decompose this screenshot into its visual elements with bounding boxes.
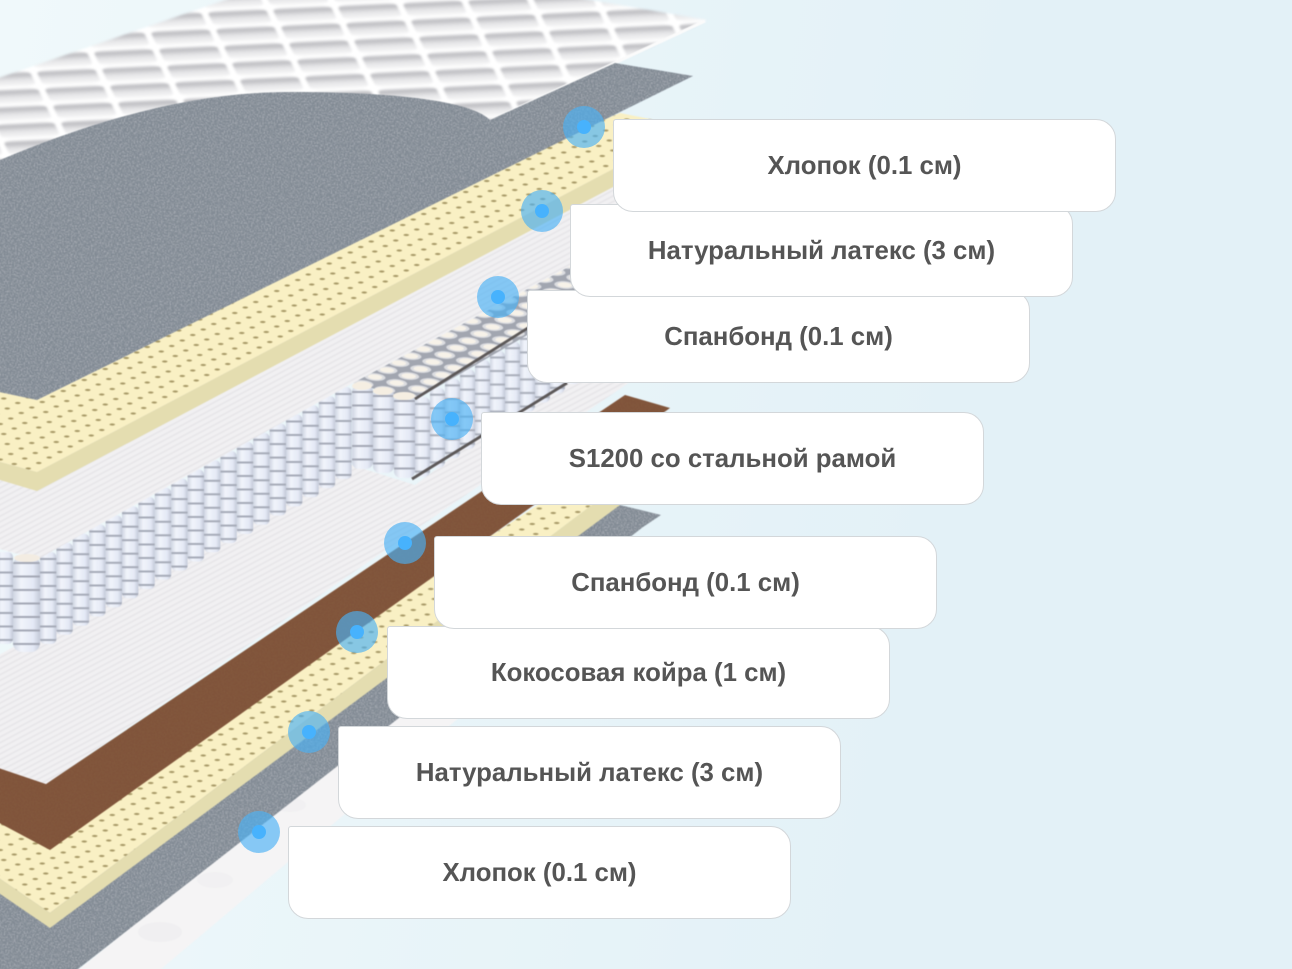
label card: top cotton: Хлопок (0.1 см) [767,152,962,180]
label card: bottom cotton [288,826,791,919]
label card: upper latex: Натуральный латекс (3 см) [648,236,995,264]
label card: upper spunbond: Спанбонд (0.1 см) [664,322,893,350]
layer: upper spunbond [0,165,640,558]
steel frame lower rail [412,383,567,479]
marker: springs [431,398,473,440]
label card: upper latex [570,204,1073,297]
marker: lower latex [288,711,330,753]
layer: top quilted cover [0,0,707,175]
label card: bottom cotton: Хлопок (0.1 см) [442,858,637,886]
steel frame upper rail [415,304,566,399]
springs corner columns [352,382,415,478]
label card: coconut coir: Кокосовая койра (1 см) [491,658,786,686]
layer: bottom quilted cover [66,700,480,969]
marker: upper latex [521,190,563,232]
label card: lower latex: Натуральный латекс (3 см) [416,758,763,786]
label card: lower latex [338,726,841,819]
marker: lower spunbond [384,522,426,564]
label card: lower spunbond [434,536,937,629]
spring tops [353,265,640,400]
layer: pocket springs block S1200 [0,265,640,652]
marker: bottom cotton [238,811,280,853]
label card: upper spunbond [527,290,1030,383]
springs left face [0,387,352,644]
layer: top cotton felt [0,63,693,400]
label card: coconut coir [387,626,890,719]
front spring column [13,556,40,652]
label card: springs: S1200 со стальной рамой [569,444,896,472]
marker: top cotton [563,106,605,148]
layer: upper natural latex [0,113,655,491]
label card: lower spunbond: Спанбонд (0.1 см) [571,568,800,596]
label card: top cotton [613,119,1116,212]
layer: coconut coir [0,395,670,850]
springs right face [415,304,580,477]
marker: upper spunbond [477,276,519,318]
layer: lower natural latex [0,490,620,928]
front spring cap [14,554,40,562]
layer: lower spunbond [0,372,640,784]
layer: bottom cotton felt [0,505,661,969]
marker: coconut coir [336,611,378,653]
label card: springs [481,412,984,505]
